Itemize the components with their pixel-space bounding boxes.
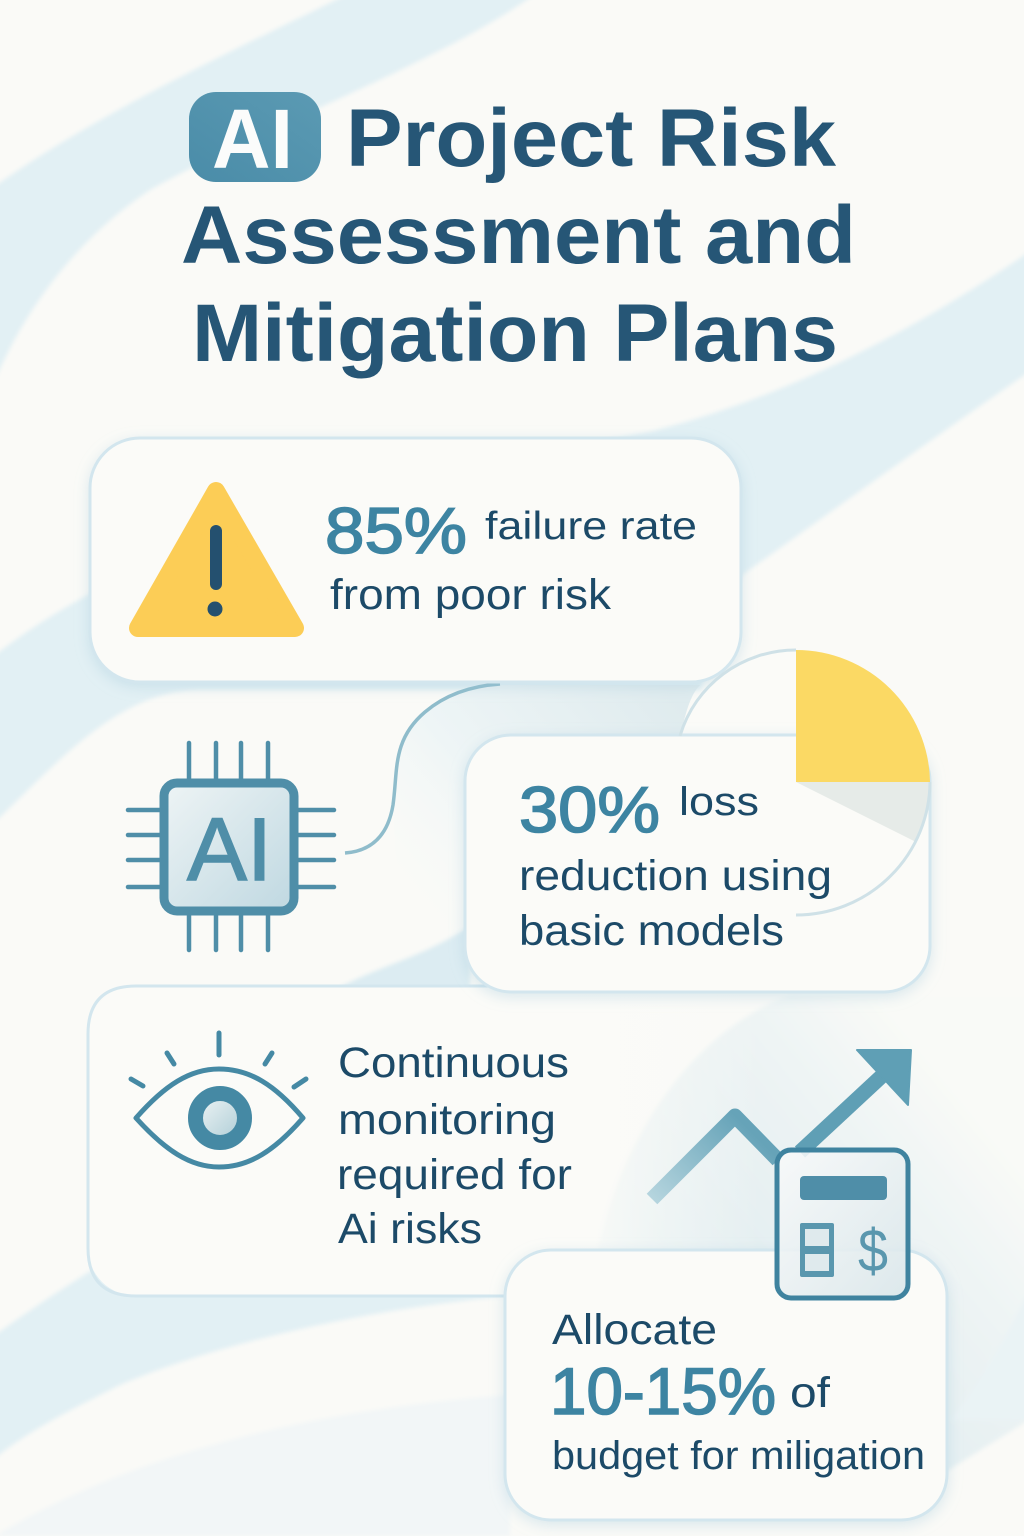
text: continuous monitoring: required for bbox=[337, 1151, 572, 1199]
text: continuous monitoring: Continuous bbox=[338, 1039, 569, 1087]
panel: loss reduction card bbox=[465, 650, 930, 992]
icon: warning triangle bbox=[138, 491, 295, 628]
icon: AI chip: AI bbox=[187, 799, 272, 899]
stat: 30% loss reduction: loss bbox=[679, 780, 759, 824]
icon: AI chip bbox=[128, 743, 334, 950]
stat: 85% failure rate: from poor risk bbox=[330, 571, 612, 619]
AI badge bbox=[189, 92, 321, 186]
text: allocate budget bbox=[550, 1306, 925, 1478]
text: allocate budget: Allocate bbox=[552, 1306, 717, 1354]
icon: rising arrow chart bbox=[652, 1050, 911, 1199]
connector curve from chip to pie card bbox=[345, 684, 700, 960]
stat: 30% loss reduction bbox=[519, 773, 832, 955]
title line 3: Mitigation Plans bbox=[192, 288, 838, 379]
pie chart backdrop bbox=[680, 650, 796, 780]
text: allocate budget: budget for miligation bbox=[552, 1434, 925, 1478]
stat: 85% failure rate: failure rate bbox=[485, 505, 697, 548]
panel: failure rate card bbox=[90, 438, 741, 682]
panel: budget card bbox=[505, 1250, 947, 1520]
text: allocate budget: of bbox=[790, 1369, 831, 1417]
title line 2: Assessment and bbox=[181, 190, 856, 281]
text: continuous monitoring: monitoring bbox=[338, 1096, 556, 1144]
pie chart bbox=[680, 650, 930, 915]
text: continuous monitoring bbox=[337, 1039, 572, 1253]
title line 1: Project Risk bbox=[346, 93, 836, 184]
stat: 30% loss reduction: reduction using bbox=[519, 852, 832, 900]
icon: budget calculator: $ bbox=[858, 1217, 888, 1284]
stat: 30% loss reduction: basic models bbox=[519, 907, 784, 955]
text: allocate budget: 10-15% bbox=[550, 1354, 776, 1428]
stat: 30% loss reduction: 30% bbox=[519, 773, 660, 846]
icon: eye bbox=[131, 1033, 306, 1167]
icon: budget calculator bbox=[777, 1150, 908, 1298]
title bbox=[181, 92, 856, 379]
stat: 85% failure rate bbox=[325, 494, 697, 619]
panel: monitoring card bbox=[88, 986, 760, 1296]
stat: 85% failure rate: 85% bbox=[325, 494, 467, 567]
text: continuous monitoring: Ai risks bbox=[338, 1205, 482, 1253]
AI badge: AI bbox=[212, 92, 293, 186]
